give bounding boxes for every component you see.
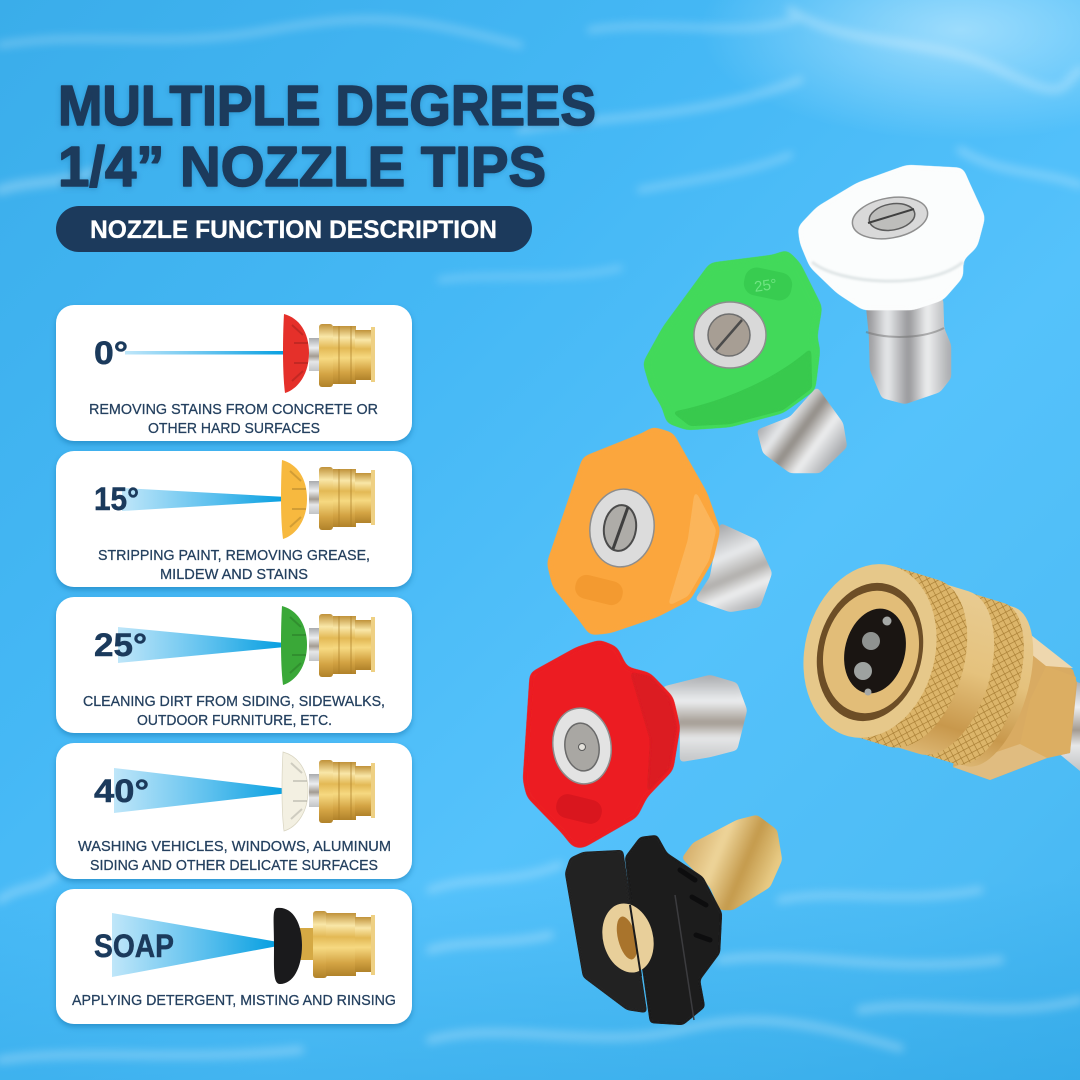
panel: 15 degree: STRIPPING PAINT, REMOVING GREASE, xyxy=(98,548,370,564)
nozzle: green: 25° xyxy=(753,276,778,296)
panel: 40 degree: WASHING VEHICLES, WINDOWS, ALUMINUM xyxy=(78,839,391,855)
panel: 25 degree: CLEANING DIRT FROM SIDING, SIDEWALKS, xyxy=(83,694,385,710)
panel: 0 degree: 0° xyxy=(94,335,128,371)
panel: 15 degree xyxy=(56,451,412,587)
panel: soap xyxy=(56,889,412,1024)
panel: 0 degree: OTHER HARD SURFACES xyxy=(148,421,320,437)
subtitle pill xyxy=(56,206,532,252)
panel: 25 degree: OUTDOOR FURNITURE, ETC. xyxy=(137,713,332,729)
panel: 40 degree xyxy=(56,743,412,879)
panel: 15 degree: 15° xyxy=(94,481,139,517)
subtitle pill: NOZZLE FUNCTION DESCRIPTION xyxy=(90,216,497,244)
nozzle: white xyxy=(798,165,985,404)
panel: 25 degree xyxy=(56,597,412,733)
nozzle: black soap xyxy=(565,815,782,1025)
panel: soap: APPLYING DETERGENT, MISTING AND RINSING xyxy=(72,993,396,1009)
panel: 40 degree: SIDING AND OTHER DELICATE SURFACES xyxy=(90,858,378,874)
panel: 40 degree: 40° xyxy=(94,773,149,809)
panel: 0 degree: REMOVING STAINS FROM CONCRETE OR xyxy=(89,402,378,418)
nozzle: green xyxy=(643,250,847,473)
brass quick coupler xyxy=(786,550,1080,781)
nozzle: orange xyxy=(547,427,772,635)
title xyxy=(58,74,596,199)
title: 1/4” NOZZLE TIPS xyxy=(58,135,546,199)
nozzle: red xyxy=(523,640,747,848)
panel: 0 degree xyxy=(56,305,412,441)
title: MULTIPLE DEGREES xyxy=(58,74,596,138)
panel: 25 degree: 25° xyxy=(94,627,147,663)
panel: soap: SOAP xyxy=(94,928,174,964)
panel: 15 degree: MILDEW AND STAINS xyxy=(160,567,308,583)
